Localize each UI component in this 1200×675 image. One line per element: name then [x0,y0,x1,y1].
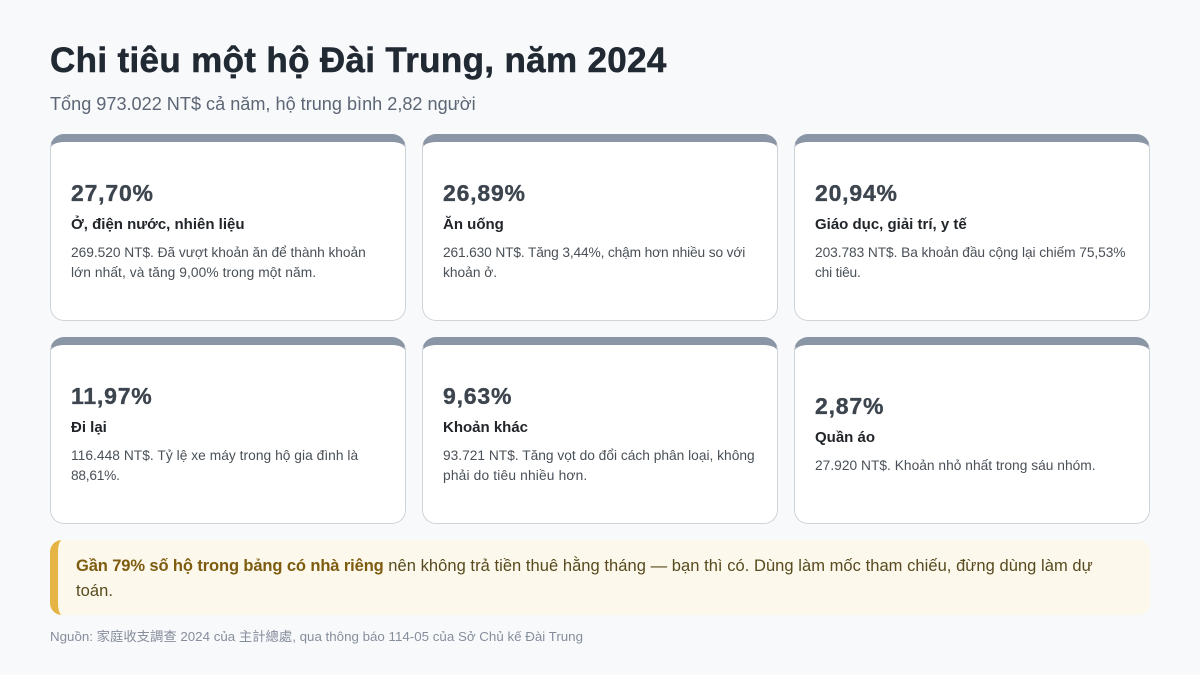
housing percentage: 27,70% [71,180,154,206]
callout text [76,556,1093,600]
housing name: Ở, điện nước, nhiên liệu [71,216,245,233]
housing description: 269.520 NT$. Đã vượt khoản ăn để thành khoản [71,245,366,260]
food percentage: 26,89% [443,180,526,206]
education name: Giáo dục, giải trí, y tế [815,216,967,233]
panel: other card [422,337,778,524]
education description: 203.783 NT$. Ba khoản đầu cộng lại chiếm 75,53% [815,245,1125,260]
callout text: toán. [76,582,113,600]
transport percentage: 11,97% [71,383,153,409]
other percentage: 9,63% [443,383,512,409]
subtitle: Tổng 973.022 NT$ cả năm, hộ trung bình 2,82 người [50,94,476,114]
callout [50,540,1150,615]
panel: clothing card [794,337,1150,524]
clothing name: Quần áo [815,429,875,446]
other description: 93.721 NT$. Tăng vọt do đổi cách phân loại, không [443,448,755,463]
food name: Ăn uống [443,216,504,233]
transport description [71,448,358,483]
other description: phải do tiêu nhiều hơn. [443,468,587,483]
education percentage: 20,94% [815,180,898,206]
transport description: 116.448 NT$. Tỷ lệ xe máy trong hộ gia đình là [71,448,358,463]
clothing percentage: 2,87% [815,393,884,419]
panel: housing card [50,134,406,321]
callout text: Gần 79% số hộ trong bảng có nhà riêng nên không trả tiền thuê hằng tháng — bạn thì có. Dùng làm mốc tham chiếu, đừng dùng làm dự [76,557,1093,575]
housing description: lớn nhất, và tăng 9,00% trong một năm. [71,265,316,280]
transport description: 88,61%. [71,468,120,483]
housing description [71,245,366,280]
other name: Khoản khác [443,419,528,436]
clothing description: 27.920 NT$. Khoản nhỏ nhất trong sáu nhóm. [815,458,1096,473]
transport name: Đi lại [71,419,107,436]
food description: 261.630 NT$. Tăng 3,44%, chậm hơn nhiều so với [443,245,745,260]
other description [443,448,755,483]
education description: chi tiêu. [815,265,861,280]
source note: Nguồn: 家庭收支調查 2024 của 主計總處, qua thông báo 114-05 của Sở Chủ kế Đài Trung [50,629,583,644]
food description [443,245,745,280]
food description: khoản ở. [443,265,497,280]
panel: food card [422,134,778,321]
education description [815,245,1125,280]
title: Chi tiêu một hộ Đài Trung, năm 2024 [50,41,667,80]
panel: transport card [50,337,406,524]
panel: education card [794,134,1150,321]
